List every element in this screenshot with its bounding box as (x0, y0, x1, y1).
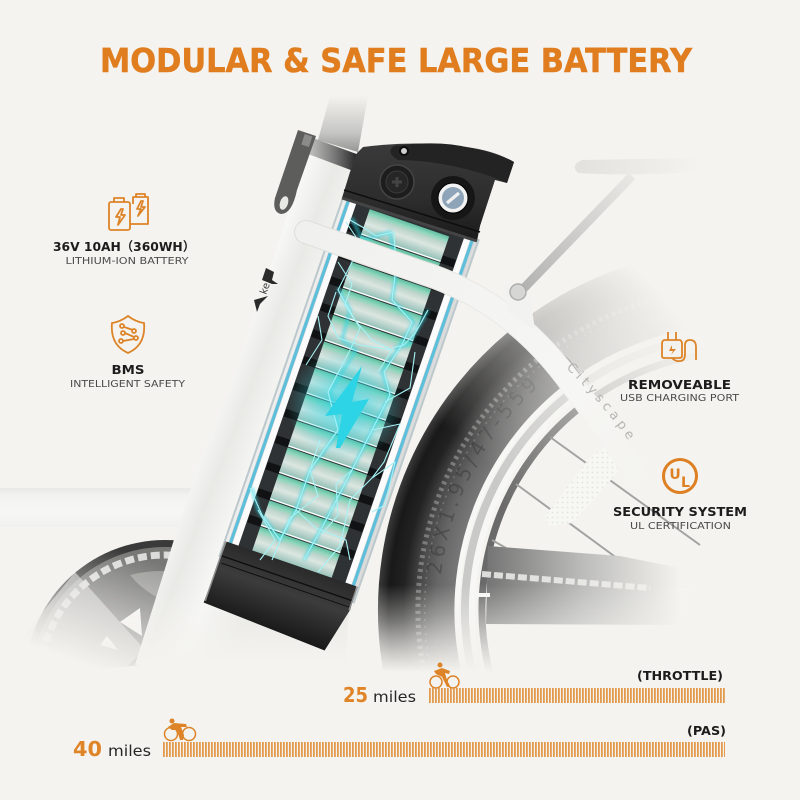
frame logo (254, 268, 278, 312)
lightning arcs (250, 218, 428, 572)
icon: UL mark (664, 460, 696, 492)
icon: UL mark: U (669, 467, 681, 483)
wheel haze above the stay (490, 200, 800, 460)
label: (PAS) (687, 723, 726, 738)
value: 40 (73, 737, 102, 761)
icon: cyclist (164, 718, 196, 740)
ticks (429, 688, 725, 703)
battery pack (201, 143, 514, 655)
key lock (431, 176, 475, 220)
rear tyre and rim (378, 274, 674, 668)
pin (400, 147, 408, 155)
label: (THROTTLE) (637, 668, 723, 683)
energy glow (287, 349, 403, 461)
charge bolt (325, 366, 369, 448)
caption: USB CHARGING PORT (620, 393, 740, 404)
heading: BMS (112, 362, 144, 377)
frame logo: ke (258, 281, 273, 296)
unit: miles (108, 742, 151, 760)
illustration: rear bike frame and wheel (0, 102, 700, 668)
heading: SECURITY SYSTEM (613, 504, 747, 519)
callout: USB charging (620, 332, 740, 404)
heading: REMOVEABLE (628, 377, 731, 392)
chain stay (478, 546, 666, 624)
mounting bracket (274, 130, 316, 214)
holder ribs (247, 223, 456, 559)
battery body (201, 193, 480, 655)
callout: battery capacity (53, 194, 195, 267)
rear rack stay passing in front of battery (294, 220, 633, 464)
seat post (318, 96, 368, 152)
icon: shield circuit (112, 316, 144, 353)
bottom end cap (202, 541, 358, 654)
range bar: throttle 25 miles (343, 662, 725, 707)
icon: batteries (109, 194, 148, 230)
caption: UL CERTIFICATION (630, 521, 731, 532)
black cell holder (233, 198, 465, 599)
caption: LITHIUM-ION BATTERY (66, 256, 189, 267)
tyre size marking: 26X1.95/47-559 (427, 378, 535, 574)
callout: BMS (70, 316, 186, 390)
spokes (492, 437, 700, 575)
icon: UL mark: L (681, 475, 690, 491)
glass side rails (218, 193, 480, 604)
icon: cyclist (430, 662, 459, 688)
callout: UL certification (613, 460, 747, 532)
chainring and chain (33, 540, 174, 666)
lower frame tube (0, 488, 200, 527)
top cap (342, 143, 514, 241)
rack strut and saddle rail (524, 158, 700, 288)
unit: miles (373, 688, 416, 706)
value: 25 (343, 683, 368, 707)
seat tube (135, 140, 380, 665)
title: MODULAR & SAFE LARGE BATTERY (100, 41, 693, 80)
heading: 36V 10AH（360WH） (53, 239, 195, 254)
battery cells (252, 209, 449, 580)
range bar: PAS 40 miles (73, 718, 726, 761)
screw (380, 165, 414, 199)
icon: charger plug (662, 332, 696, 361)
caption: INTELLIGENT SAFETY (70, 379, 186, 390)
pedal (545, 436, 622, 526)
rear rack stay passing in front of battery: Cityscape (568, 363, 633, 440)
seat clamp (308, 138, 362, 172)
ticks (163, 742, 725, 757)
